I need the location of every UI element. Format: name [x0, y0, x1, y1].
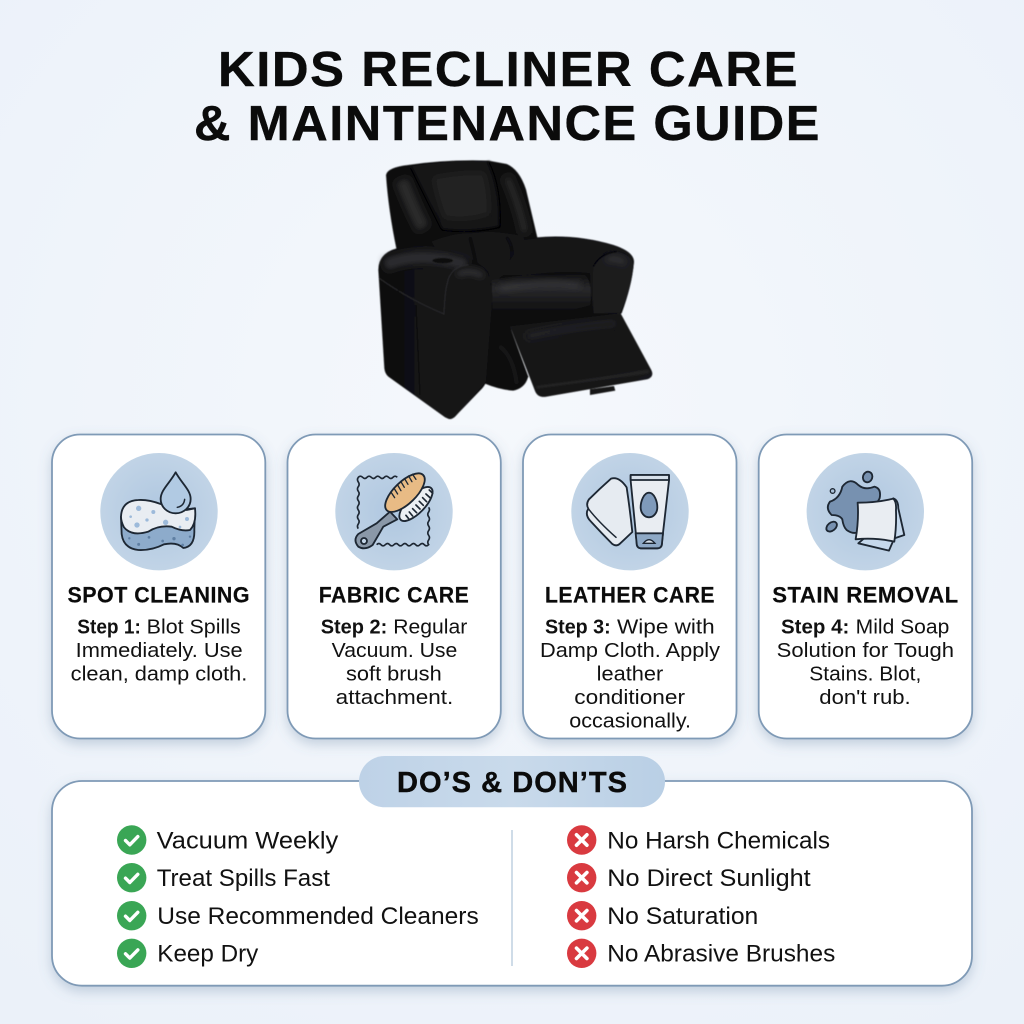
- step text: Damp Cloth. Apply: [540, 639, 721, 662]
- heading: spot cleaning: SPOT CLEANING: [68, 582, 250, 608]
- step text: [321, 615, 467, 709]
- don't item: no abrasive brushes: No Abrasive Brushes: [607, 940, 835, 967]
- do item: keep dry: Keep Dry: [157, 940, 259, 967]
- step text: Solution for Tough: [777, 639, 954, 662]
- do item: keep dry: [117, 939, 259, 968]
- step text: don't rub.: [819, 686, 911, 709]
- icon: stain and cloth: [807, 453, 924, 570]
- heading: leather care: LEATHER CARE: [545, 582, 715, 608]
- panel: fabric care: [288, 434, 501, 738]
- step text: Mild Soap: [856, 615, 949, 638]
- heading pill: do's and don'ts: DO’S & DON’TS: [397, 767, 628, 799]
- step text: Step 4:: [781, 615, 849, 638]
- icon: fabric swatch and brush: [335, 453, 453, 570]
- panel: spot cleaning: [52, 434, 265, 738]
- panel: leather care: [523, 434, 736, 738]
- step text: soft brush: [346, 662, 442, 685]
- title: & MAINTENANCE GUIDE: [194, 97, 821, 151]
- step text: Vacuum. Use: [332, 639, 457, 662]
- title: [194, 43, 821, 151]
- step text: Immediately. Use: [76, 639, 243, 662]
- list: do's: [117, 825, 479, 968]
- step text: leather: [597, 662, 663, 685]
- step text: Regular: [393, 615, 467, 638]
- step text: clean, damp cloth.: [71, 662, 247, 685]
- don't item: no direct sunlight: No Direct Sunlight: [607, 865, 811, 892]
- do item: vacuum weekly: Vacuum Weekly: [157, 827, 339, 854]
- step text: Step 2:: [321, 615, 387, 638]
- heading pill: do's and don'ts: [359, 756, 665, 807]
- step text: [540, 615, 721, 732]
- do item: use recommended cleaners: Use Recommended Cleaners: [157, 903, 479, 930]
- icon: sponge and water drop: [100, 453, 218, 570]
- step text: attachment.: [336, 686, 453, 709]
- recliner chair photo: [378, 160, 652, 419]
- step text: Step 3:: [545, 615, 611, 638]
- don't item: no saturation: No Saturation: [607, 903, 758, 930]
- step text: [71, 615, 247, 685]
- panel: do's and don'ts: [52, 756, 972, 986]
- step text: [777, 615, 954, 709]
- step text: Step 1:: [77, 615, 141, 638]
- do item: treat spills fast: Treat Spills Fast: [157, 865, 330, 892]
- step text: Wipe with: [617, 615, 715, 638]
- step text: Blot Spills: [147, 615, 241, 638]
- don't item: no harsh chemicals: No Harsh Chemicals: [607, 827, 830, 854]
- list: don'ts: [567, 825, 835, 968]
- icon: cloth and conditioner tube: [571, 453, 689, 570]
- title: KIDS RECLINER CARE: [218, 43, 799, 97]
- step text: Stains. Blot,: [809, 662, 921, 685]
- step text: conditioner: [574, 686, 685, 709]
- step text: occasionally.: [569, 709, 691, 732]
- heading: fabric care: FABRIC CARE: [319, 582, 469, 608]
- panel: stain removal: [759, 434, 972, 738]
- heading: stain removal: STAIN REMOVAL: [772, 582, 959, 608]
